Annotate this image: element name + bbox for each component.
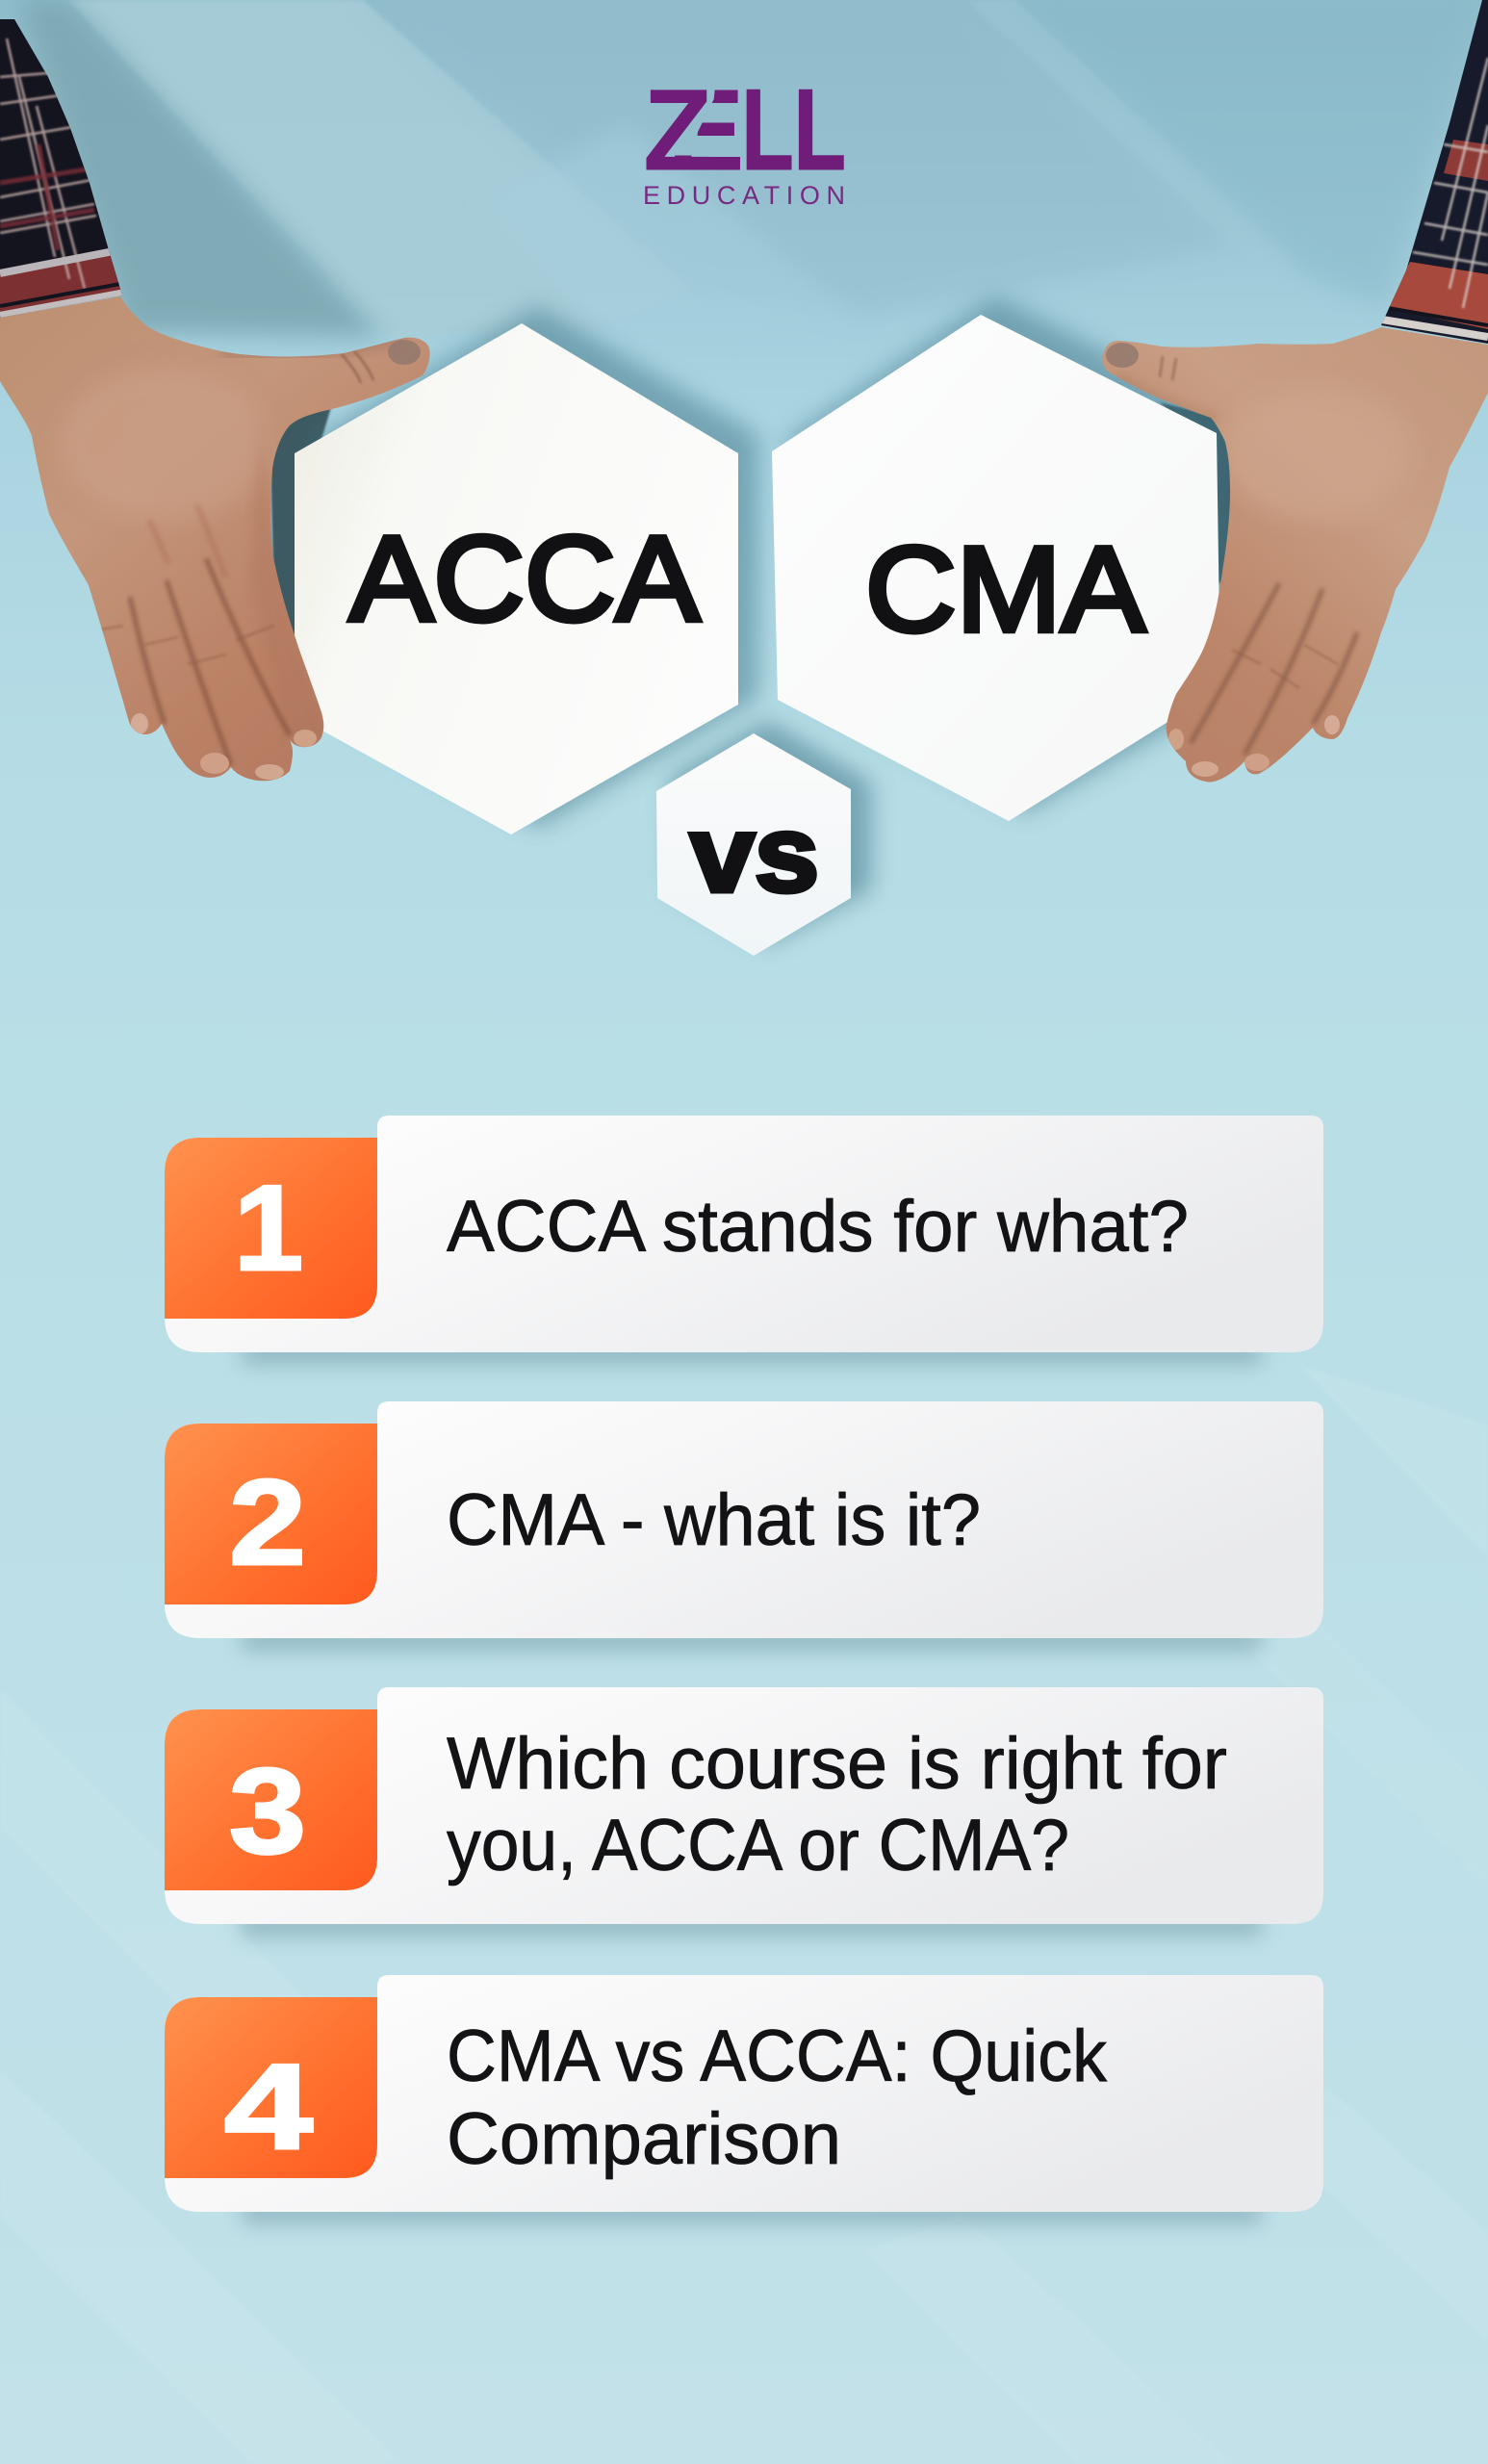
logo: Zell Education: EDUCATION	[643, 181, 845, 210]
card text 3	[447, 1723, 1227, 1886]
right sleeve: plaid	[1381, 0, 1488, 344]
card 3	[165, 1687, 1323, 1936]
hexagon shadows	[318, 296, 1242, 943]
card text 2: CMA - what is it?	[447, 1479, 981, 1561]
card text 4: CMA vs ACCA: Quick	[447, 2015, 1108, 2097]
nails	[1106, 343, 1340, 777]
card text 4	[447, 2015, 1108, 2180]
logo: Zell Education: E	[667, 64, 745, 195]
card text 3: you, ACCA or CMA?	[447, 1805, 1069, 1886]
hexagon: CMA	[772, 315, 1220, 821]
number badge 3	[165, 1709, 377, 1890]
label: vs: vs	[690, 794, 819, 914]
hexagon: ACCA	[295, 323, 738, 834]
logo: Zell Education: L	[741, 66, 793, 194]
logo: Zell Education: L	[794, 66, 846, 194]
number badge 3: 3	[229, 1743, 306, 1879]
card text 4: Comparison	[447, 2098, 841, 2180]
number badge 4: 4	[224, 2039, 313, 2174]
number badge 2	[165, 1424, 377, 1604]
logo: Zell Education	[645, 89, 844, 204]
label: ACCA: ACCA	[349, 510, 700, 647]
number badge 2: 2	[229, 1454, 306, 1590]
left sleeve: plaid	[0, 19, 122, 318]
card 1	[165, 1116, 1323, 1364]
hexagon: vs	[656, 733, 851, 956]
nails	[131, 340, 421, 780]
label: CMA: CMA	[865, 522, 1145, 656]
logo: Zell Education: Z	[643, 64, 712, 195]
card text 1: ACCA stands for what?	[447, 1186, 1189, 1268]
dark gap shadows between hands and hexagons	[269, 402, 1235, 664]
card 4	[165, 1975, 1323, 2223]
card 2	[165, 1401, 1323, 1650]
left hand	[0, 289, 433, 799]
number badge 1: 1	[234, 1160, 303, 1296]
number badge 4	[165, 1997, 377, 2178]
right hand	[1097, 322, 1488, 794]
card text 3: Which course is right for	[447, 1723, 1227, 1805]
number badge 1	[165, 1138, 377, 1319]
